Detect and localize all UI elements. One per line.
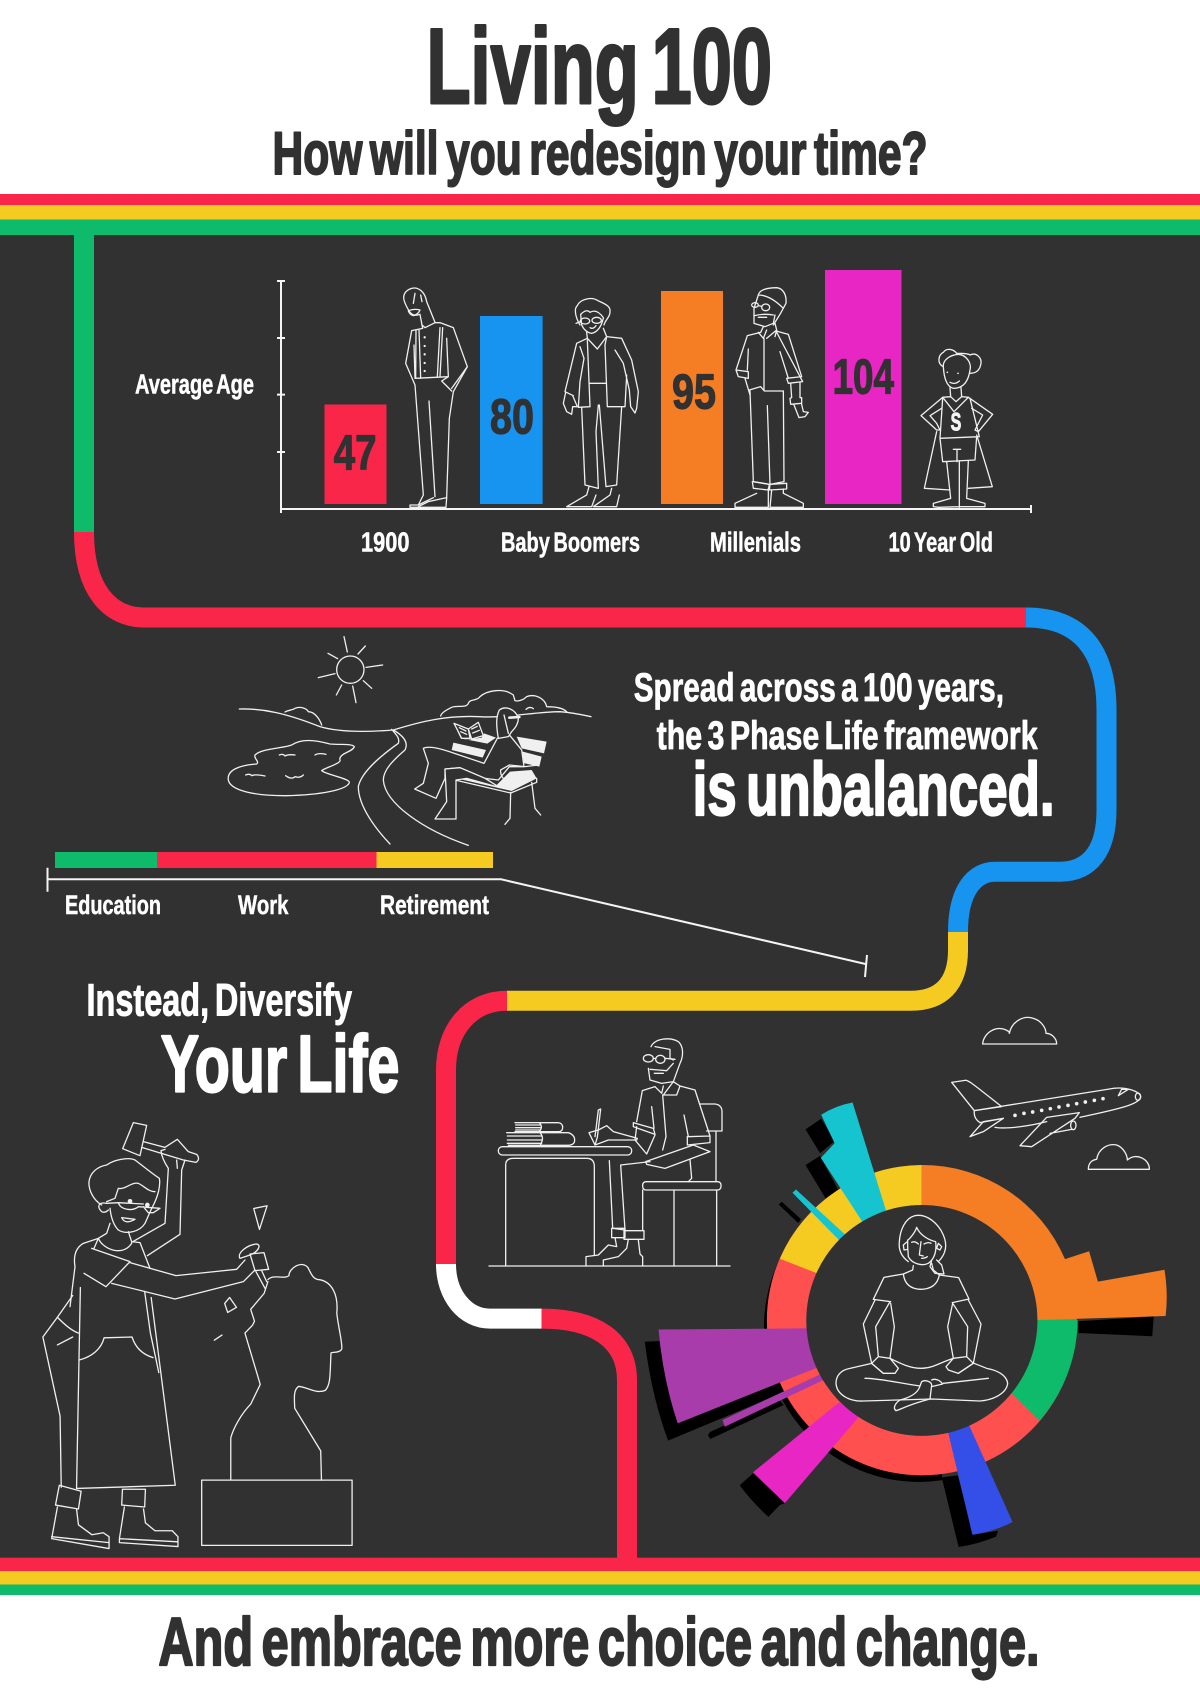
segment: indigo (947, 1424, 1013, 1535)
category labels: 10 Year Old (888, 527, 993, 558)
icon: ten year old in cape (921, 349, 993, 507)
bust statue (231, 1265, 342, 1480)
bar chart: average age by generation (135, 270, 1031, 558)
bar: millenials: 95 (672, 366, 716, 420)
stone chips (214, 1206, 267, 1340)
desk and books (489, 1123, 730, 1266)
icon: baby boomer woman (563, 299, 638, 507)
chair (643, 1104, 722, 1266)
phase labels: Work (238, 890, 289, 920)
category labels: Millenials (710, 527, 801, 558)
icon: millenial man (735, 288, 808, 507)
pedestal (202, 1480, 352, 1545)
dark background panel (0, 235, 1200, 1558)
bar: baby boomers: 80 (490, 390, 534, 444)
statement: unbalanced framework: the 3 Phase Life framework (657, 714, 1038, 758)
illustration: airplane and clouds (952, 1017, 1149, 1169)
category labels: 1900 (361, 527, 410, 558)
wheel centre (806, 1205, 1037, 1436)
writer figure (586, 1039, 710, 1266)
phase labels (65, 890, 489, 920)
illustration: reader on bench (415, 708, 547, 824)
subtitle: How will you redesign your time? (272, 120, 928, 187)
statement: unbalanced framework: is unbalanced. (693, 747, 1055, 831)
category labels (361, 527, 993, 558)
segment: magenta (753, 1402, 860, 1503)
bar: baby boomers (480, 316, 543, 504)
phase labels: Education (65, 890, 161, 920)
chart axes (277, 281, 1031, 513)
segment: yellow (780, 1165, 921, 1273)
segment: teal sliver (792, 1190, 847, 1244)
bracket and pointer line (48, 868, 867, 977)
bar: 10 year old (825, 270, 902, 504)
statement: diversify your life: Your Life (161, 1020, 400, 1110)
icon: man of 1900 (404, 288, 467, 507)
icon: sun (318, 637, 383, 703)
category labels: Baby Boomers (501, 527, 640, 558)
illustration: sculptor and bust (43, 1123, 352, 1549)
illustration: writer at desk (489, 1039, 730, 1266)
bar: 1900 (324, 404, 386, 504)
title: Living 100 (426, 6, 772, 126)
segment: purple sliver (722, 1373, 827, 1427)
segment: purple (659, 1328, 830, 1423)
icon: meditating woman (836, 1215, 1008, 1411)
illustration: park scene (228, 637, 591, 845)
bar: 1900: 47 (334, 427, 376, 481)
reader figure (415, 708, 538, 819)
icon: ten year old in cape: S (951, 408, 961, 436)
ring base: coral segments (767, 1165, 1077, 1475)
three phase life bar (55, 852, 493, 868)
axis label: Average Age (135, 368, 254, 399)
wheel drop shadows (645, 1119, 1154, 1547)
radial life wheel chart (645, 1103, 1167, 1547)
segment: green (983, 1320, 1078, 1421)
phase labels: Retirement (380, 890, 489, 920)
bar: 10 year old: 104 (833, 350, 894, 404)
top colour stripes (0, 194, 1200, 235)
icon: cloud lower (1088, 1145, 1149, 1169)
segment: orange (921, 1165, 1167, 1320)
sculptor upper body and hammer (70, 1123, 269, 1307)
landscape hills, clouds and pond (228, 691, 591, 845)
bottom colour stripes (0, 1558, 1200, 1595)
icon: airplane (952, 1080, 1141, 1147)
statement: diversify your life: Instead, Diversify (86, 975, 352, 1026)
winding life path (84, 235, 1106, 1558)
sculptor lower body (43, 1206, 352, 1549)
icon: cloud upper (983, 1017, 1057, 1044)
bar: millenials (661, 291, 723, 504)
statement: unbalanced framework: Spread across a 100 years, (634, 666, 1004, 710)
statement: diversify your life (86, 975, 400, 1110)
segment: teal (821, 1103, 891, 1230)
bench slats (428, 731, 547, 824)
statement: unbalanced framework (634, 666, 1055, 831)
